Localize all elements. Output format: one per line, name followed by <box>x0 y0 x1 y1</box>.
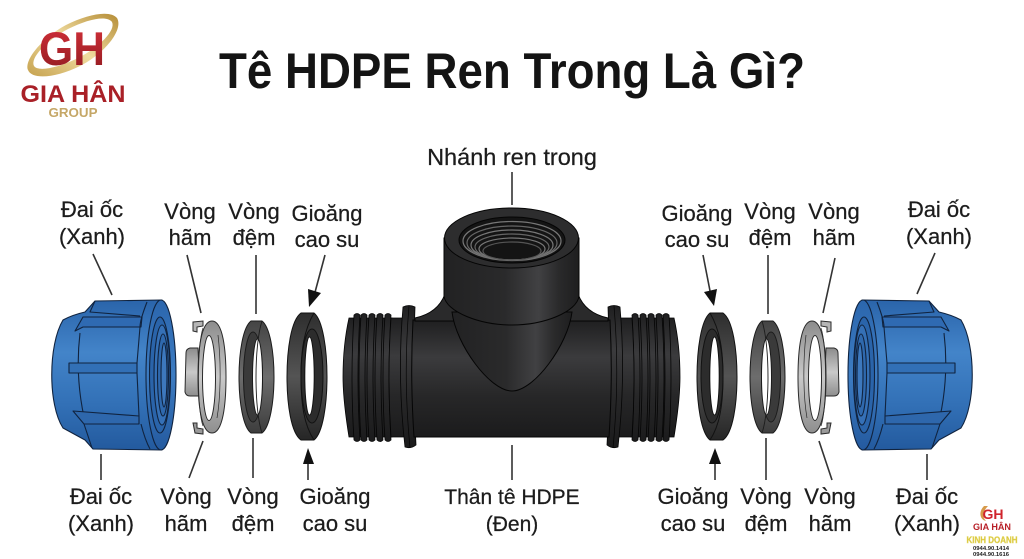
label: Đai ốc bottom left: Đai ốc <box>70 484 132 509</box>
logo: Gia Hân Group <box>20 14 126 120</box>
tee vertical branch <box>444 238 579 325</box>
right retaining ring <box>798 321 839 434</box>
label: Gioăng cao su bottom left: cao su <box>303 511 367 536</box>
small logo ring <box>980 506 988 521</box>
tee gussets <box>415 294 608 321</box>
left washer <box>239 321 274 433</box>
logo letters GH: GH <box>39 22 105 75</box>
label: Thân tê HDPE: (Đen) <box>486 513 538 536</box>
label: Vòng hãm bottom right: hãm <box>809 511 851 536</box>
label: Vòng hãm top right: Vòng <box>808 199 860 224</box>
label: Vòng đệm bottom left: đệm <box>232 511 274 536</box>
label: Vòng hãm bottom left: hãm <box>165 511 207 536</box>
right blue nut <box>848 300 972 450</box>
phone 2: 0944.90.1616 <box>973 552 1009 558</box>
label: Thân tê HDPE: Thân tê HDPE <box>444 486 580 509</box>
right washer <box>750 321 785 433</box>
right rubber gasket <box>697 313 737 440</box>
left retaining ring <box>185 321 226 434</box>
leader lines and arrows <box>93 172 935 480</box>
left blue nut <box>52 300 176 450</box>
label: Vòng đệm bottom left: Vòng <box>227 484 279 509</box>
left rubber gasket <box>287 313 327 440</box>
label: Gioăng cao su bottom right: cao su <box>661 511 725 536</box>
label: Vòng đệm top left: Vòng <box>228 199 280 224</box>
right labels top <box>662 197 972 252</box>
label: Đai ốc top right: Đai ốc <box>908 197 970 222</box>
label: Vòng đệm top right: đệm <box>749 225 791 250</box>
small GH: GH <box>982 506 1004 522</box>
label: Đai ốc bottom right: (Xanh) <box>894 511 960 536</box>
label: Đai ốc top left: Đai ốc <box>61 197 123 222</box>
right threaded end <box>607 306 680 448</box>
label: Vòng hãm top right: hãm <box>813 225 855 250</box>
label: Vòng đệm bottom right: đệm <box>745 511 787 536</box>
label: Vòng hãm bottom left: Vòng <box>160 484 212 509</box>
label: Nhánh ren trong: Nhánh ren trong <box>427 144 597 170</box>
label: Vòng đệm top right: Vòng <box>744 199 796 224</box>
logo name: GIA HÂN <box>20 80 126 108</box>
small Gia Hân Kinh Doanh logo <box>966 506 1018 558</box>
label: Vòng hãm top left: Vòng <box>164 199 216 224</box>
black HDPE tee <box>343 208 680 448</box>
label: Vòng hãm top left: hãm <box>169 225 211 250</box>
tee saddle <box>452 312 572 391</box>
label: Gioăng cao su top right: Gioăng <box>662 201 732 226</box>
label: Gioăng cao su bottom right: Gioăng <box>658 484 728 509</box>
label: Gioăng cao su bottom left: Gioăng <box>300 484 370 509</box>
label: Vòng hãm bottom right: Vòng <box>804 484 856 509</box>
left labels top <box>59 197 362 252</box>
title: Tê HDPE Ren Trong Là Gì? <box>219 43 805 99</box>
branch top opening <box>444 208 578 268</box>
label: Vòng đệm bottom right: Vòng <box>740 484 792 509</box>
label: Đai ốc bottom left: (Xanh) <box>68 511 134 536</box>
phone 1: 0944.90.1414 <box>973 546 1010 552</box>
label: Đai ốc bottom right: Đai ốc <box>896 484 958 509</box>
tee main body <box>412 320 611 437</box>
logo ring <box>27 14 118 76</box>
label: Vòng đệm top left: đệm <box>233 225 275 250</box>
bottom labels <box>68 484 960 536</box>
left threaded end <box>343 306 416 448</box>
logo group: GROUP <box>48 105 98 120</box>
small GIA HÂN: GIA HÂN <box>973 521 1011 532</box>
branch internal thread <box>459 217 565 263</box>
label: Đai ốc top right: (Xanh) <box>906 224 972 249</box>
label: Gioăng cao su top left: Gioăng <box>292 201 362 226</box>
label: Gioăng cao su top left: cao su <box>295 227 359 252</box>
label: Đai ốc top left: (Xanh) <box>59 224 125 249</box>
label: Gioăng cao su top right: cao su <box>665 227 729 252</box>
